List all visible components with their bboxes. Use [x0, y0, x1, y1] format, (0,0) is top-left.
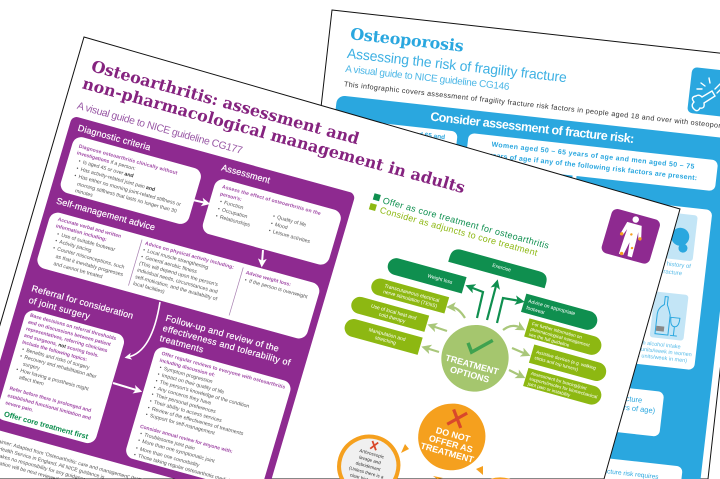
box: referral for joint surgery: •How having a prosthesis might	[15, 367, 90, 393]
box: self-management advice: •If the person is overweight	[244, 277, 309, 301]
box: follow-up and review: •Support for self-management	[145, 412, 216, 437]
box: follow-up and review: •Impact on their quality of life	[157, 372, 225, 396]
subtitle: visual guide: A visual guide to NICE guideline CG146	[345, 64, 510, 93]
title: Osteoporosis: Osteoporosis	[349, 24, 465, 56]
heading: follow-up and review	[159, 313, 295, 378]
treatment: assistive devices: sticks and top turners)	[534, 355, 579, 372]
text: left criteria fragment: All women aged 65 and	[373, 126, 445, 141]
treatment: footwear: Advice on appropriate	[527, 299, 576, 317]
box: follow-up and review: •Their ability to access services	[149, 399, 223, 424]
text: alcohol intake: >21 units/week in men)	[630, 352, 687, 364]
box: previous fracture	[516, 376, 664, 437]
heading: assessment: Assessment	[220, 162, 272, 185]
treatment: further information: For further information on	[531, 321, 583, 340]
box: follow-up and review: •Troublesome joint pain	[139, 431, 196, 452]
box: assessment: Assess the effect of osteoarthritis on the	[221, 184, 322, 217]
treatment: assistive devices: Assistive devices (e.g. walking	[536, 349, 597, 371]
box: self-management advice: Advice on physical activity including:	[144, 241, 235, 271]
icons: orange pointers	[401, 444, 483, 479]
box: self-management advice: •Local muscle strengthening	[142, 247, 209, 271]
box: self-management advice: local facilities)	[132, 281, 165, 295]
box: self-management advice: •Use of suitable footwear	[56, 231, 116, 253]
box: follow-up and review: •More than one comorbidity	[135, 445, 200, 469]
text: alcohol intake	[627, 339, 693, 365]
box: referral for joint surgery: severe pain.	[4, 400, 34, 414]
box: assessment: •Occupation	[217, 206, 248, 220]
subtitle: assessing risk: Assessing the risk of fragility fracture	[346, 45, 568, 85]
box: diagnostic criteria: •Is aged 45 or over and	[78, 159, 134, 179]
legend: core and adjunct treatments: Offer as core treatment for osteoarthritis	[382, 195, 551, 251]
box: self-management advice: and cannot be treated	[53, 261, 103, 280]
circle: do not offer as treatment: DO NOT	[435, 425, 472, 444]
treatment: footwear	[521, 294, 600, 332]
treatment: further information	[524, 318, 604, 357]
box: diagnostic criteria: •Has either no morning joint-related stiffness or	[73, 173, 182, 208]
circle: arthroscopic lavage	[332, 430, 406, 479]
box: assessment: person's:	[219, 191, 243, 203]
arrow: assessment to self-management	[262, 250, 263, 263]
treatment: bracing assessment: joint pain or instability	[526, 381, 572, 398]
box: assessment: •Mood	[270, 221, 288, 231]
box: assessment	[201, 177, 343, 267]
box: risk factors	[450, 183, 713, 370]
treatment: footwear: footwear	[525, 305, 546, 316]
box: referral for joint surgery: established functional limitation and	[7, 393, 92, 422]
box: referral for joint surgery: •Recovery and rehabilitation after	[19, 353, 97, 380]
box: referral for joint surgery: Base decisions on referral thresholds	[29, 313, 117, 342]
box: assessment: •Relationships	[215, 213, 251, 229]
treatment: weight loss: Weight loss	[427, 273, 454, 286]
box: lower note	[506, 448, 683, 479]
box: self-management advice: •Counter misconceptions, such	[52, 245, 125, 271]
box: referral for joint surgery: Include the following topics:	[21, 340, 88, 363]
box: referral for joint surgery: Offer core treatment first	[3, 409, 90, 441]
treatment: TENS: Transcutaneous electrical	[384, 283, 440, 304]
box: diagnostic criteria: morning stiffness that lasts no longer than 30	[76, 182, 177, 215]
box: women and men criteria	[465, 133, 718, 191]
box: self-management advice: (This will depend upon the person's	[138, 261, 219, 288]
panel: blue assessment panel	[291, 95, 720, 479]
heading: referral for joint surgery: of joint surgery	[28, 295, 92, 321]
heading: diagnostic criteria: Diagnostic criteria	[77, 123, 152, 152]
treatment: bracing assessment: supports/insoles for biomechanical	[529, 376, 598, 400]
treatment: weight loss	[386, 256, 467, 293]
circle: do not offer as treatment: TREATMENT	[419, 441, 475, 465]
text: alcohol intake: High alcohol intake	[634, 339, 681, 351]
arrows: core treatments	[470, 284, 520, 323]
box: follow-up and review: •Any concerns they have	[153, 385, 212, 407]
treatment: further information: pharmacological management	[530, 327, 591, 348]
treatment: heat and cold: Use of local heat and	[370, 303, 417, 322]
icon tile: alcohol	[650, 291, 689, 341]
panel: osteoporosis back page	[279, 10, 720, 479]
circle: arthroscopic lavage: lavage and	[358, 455, 382, 465]
treatment: TENS	[369, 277, 449, 314]
box: self-management advice: information including:	[55, 223, 108, 243]
title: osteoarthritis: non-pharmacological management in adults	[80, 74, 467, 197]
text: history of fracture: hip fracture	[652, 268, 683, 277]
icon tile: broken bone	[687, 67, 720, 118]
box: diagnostic criteria: minutes	[74, 188, 94, 199]
circle: treatment options: OPTIONS	[449, 364, 491, 385]
box: diagnostic criteria: Diagnose osteoarthritis clinically without	[78, 144, 178, 177]
box: follow-up and review	[124, 345, 293, 479]
box: follow-up and review: •More than one symptomatic joint	[137, 438, 216, 465]
box: left criteria	[333, 119, 458, 191]
text: women and men criteria: years of age if any of the following risk factors are present:	[488, 152, 697, 182]
legend: core and adjunct treatments: Consider as adjuncts to core treatment	[379, 205, 539, 258]
text: history of fracture: Parental history of	[642, 259, 692, 270]
treatment: assistive devices	[529, 345, 609, 383]
treatment: TENS: nerve stimulation (TENS)	[382, 289, 438, 310]
heading: follow-up and review: effectiveness and tolerability of	[162, 323, 292, 368]
box: referral for joint surgery: and on discussions between patient	[27, 319, 112, 348]
arrow: referral to follow-up	[113, 383, 138, 390]
heading: consider assessment: Consider assessment of fracture risk:	[430, 110, 635, 146]
box: assessment: •Function	[219, 199, 244, 211]
box: follow-up and review: •The person's knowledge of the condition	[155, 378, 250, 410]
box: diagnostic criteria: investigations if a person:	[76, 150, 136, 172]
connector notch	[570, 175, 577, 196]
circle: do not offer as treatment: OFFER AS	[428, 433, 474, 455]
treatment: bracing assessment	[523, 368, 604, 407]
box: assessment: •Quality of life	[272, 214, 307, 229]
treatment: manipulation: Manipulation and	[368, 327, 406, 343]
box: follow-up and review: •Their personal preferences	[151, 392, 217, 415]
box: self-management advice: •Activity pacing	[54, 238, 92, 254]
box: self-management advice: •General aerobic fitness	[140, 254, 198, 275]
box: self-management advice: Accurate verbal and written	[57, 217, 122, 240]
text: previous fracture: (under 40 years of age)	[577, 398, 656, 415]
text: history of fracture	[642, 259, 692, 278]
heading: self-management advice: Self-management advice	[55, 196, 156, 232]
box: diagnostic criteria	[58, 135, 203, 226]
box: self-management advice: individual needs, circumstances and	[136, 268, 218, 295]
title: osteoarthritis: Osteoarthritis: assessment and	[89, 56, 362, 148]
box: follow-up and review: Consider annual review for anyone with:	[139, 424, 234, 455]
box: self-management advice: self-motivation, and the availability of	[134, 274, 218, 303]
box: referral for joint surgery: representatives, referring clinicians	[25, 326, 108, 354]
panel: purple care pathway	[0, 116, 356, 479]
box: self-management advice	[35, 211, 322, 341]
circle: do not offer as treatment	[410, 396, 494, 478]
text: previous fracture	[577, 389, 657, 415]
treatment: manipulation: stretching	[374, 335, 397, 347]
treatment: exercise	[448, 247, 549, 288]
treatment: heat and cold	[349, 295, 429, 332]
subtitle: visual guide: A visual guide to NICE guideline CG177	[76, 101, 244, 157]
box: referral for joint surgery: Refer before there is prolonged and	[9, 386, 92, 414]
treatment: manipulation	[342, 317, 423, 355]
box: assessment: •Leisure activities	[268, 228, 311, 245]
icon: broken bone outline	[692, 78, 720, 111]
circle: treatment options: TREATMENT	[444, 353, 500, 377]
treatment: further information: see the full guideline	[528, 332, 570, 348]
arrows: adjunct treatments	[426, 307, 526, 376]
box: self-management advice: as that it inevitably progresses	[55, 254, 124, 278]
box: follow-up and review: •Symptom progression	[159, 365, 213, 385]
box: referral for joint surgery: surgery	[22, 362, 41, 372]
arrow: self-management to referral	[128, 302, 160, 357]
box: referral for joint surgery: affect them	[18, 375, 44, 388]
text: alcohol intake: (>14 units/week in women	[628, 345, 692, 358]
icon: body with painful joints	[600, 208, 661, 265]
box: referral for joint surgery: •Benefits and risks of surgery	[21, 347, 91, 371]
heading: follow-up and review: treatments	[159, 333, 205, 355]
treatment: exercise: Exercise	[491, 263, 512, 274]
box: referral for joint surgery	[0, 308, 126, 445]
icon tile: history of fracture	[659, 212, 698, 261]
arrow: diagnostic to assessment	[193, 200, 206, 203]
heading: follow-up and review: Follow-up and review of the	[165, 313, 280, 354]
box: self-management advice: Advise weight loss:	[245, 270, 292, 288]
heading: referral for joint surgery: Referral for consideration	[30, 283, 135, 321]
circle: next do-not-offer option	[461, 472, 539, 479]
treatment: bracing assessment: Assessment for bracing/joint	[530, 371, 588, 391]
box: follow-up and review: •Review of the effectiveness of treatments	[147, 405, 244, 437]
circle: arthroscopic lavage: debridement	[355, 460, 382, 472]
box: follow-up and review: including discussion of:	[159, 358, 216, 379]
box: diagnostic criteria: •Has activity-related joint pain and	[76, 166, 156, 193]
circle: treatment options	[433, 317, 517, 399]
circle: arthroscopic lavage: Arthroscopic	[359, 448, 385, 460]
treatment: heat and cold: cold therapy	[378, 312, 406, 325]
box: referral for joint surgery: and surgeons, not scoring tools.	[23, 333, 100, 359]
box: follow-up and review: Offer regular reviews to everyone with osteoarthritis	[161, 351, 286, 391]
text: previous fracture: Previous fracture	[585, 390, 643, 405]
text: women and men criteria: Women aged 50 – 65 years of age and men aged 50 – 75	[491, 141, 695, 171]
